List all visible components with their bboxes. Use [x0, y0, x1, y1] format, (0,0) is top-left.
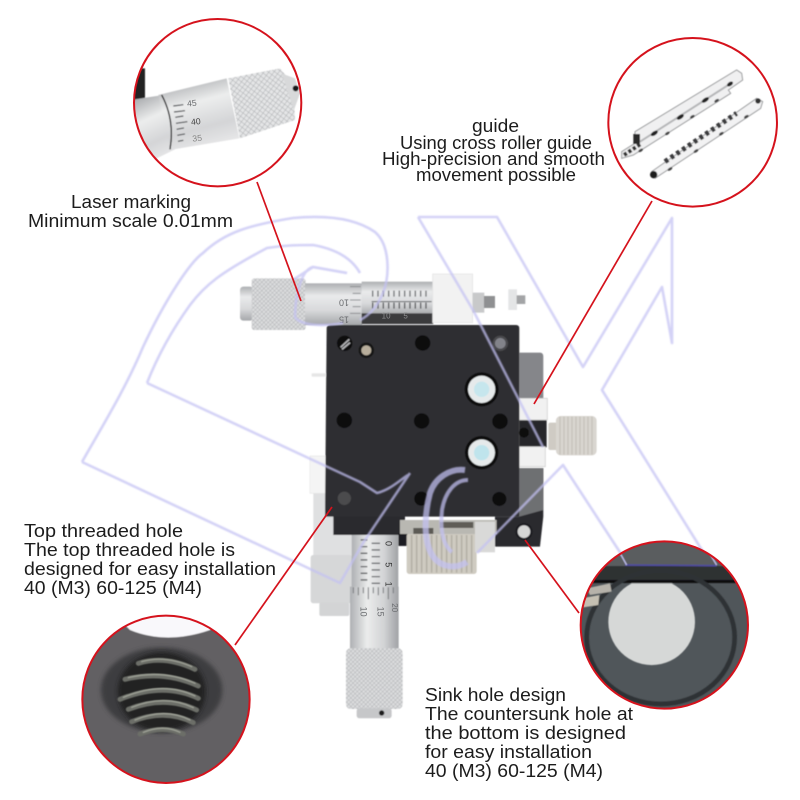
- micrometer scale numbers: 1: [383, 582, 393, 587]
- text: guide: guide: [472, 116, 519, 136]
- text: sink hole design: the bottom is designed: [425, 723, 626, 743]
- text: sink hole design: 40 (M3) 60-125 (M4): [425, 761, 603, 781]
- micrometer scale numbers: 15: [339, 315, 349, 325]
- micrometer scale numbers: 10: [339, 297, 349, 307]
- top micrometer: [240, 274, 525, 330]
- inset circle: micrometer laser marking: 45: [186, 98, 197, 109]
- main product: XY translation stage: [240, 274, 597, 718]
- text: sink hole design: The countersunk hole at: [425, 704, 633, 724]
- text: laser marking: Minimum scale 0.01mm: [28, 211, 233, 231]
- text: laser marking: [28, 192, 233, 231]
- text: top threaded hole: designed for easy installation: [24, 559, 276, 579]
- micrometer scale numbers: 10: [382, 311, 391, 320]
- leader line: sink hole: [525, 540, 579, 613]
- inset circle: micrometer laser marking: 35: [192, 133, 203, 144]
- text: top threaded hole: The top threaded hole is: [24, 540, 235, 560]
- watermark outline: [82, 217, 710, 583]
- text: sink hole design: Sink hole design: [425, 685, 566, 705]
- micrometer scale numbers: [339, 297, 408, 617]
- text: top threaded hole: Top threaded hole: [24, 521, 183, 541]
- text: top threaded hole: [24, 521, 276, 598]
- micrometer scale numbers: 5: [383, 562, 393, 567]
- micrometer scale numbers: 5: [403, 311, 408, 320]
- inset circle: countersunk sink hole: [580, 540, 750, 709]
- text: guide: Using cross roller guide: [400, 133, 592, 153]
- text: guide: [382, 116, 605, 185]
- inset circle: micrometer laser marking: [130, 19, 301, 186]
- micrometer scale numbers: 10: [359, 607, 369, 617]
- left rear micrometer: [310, 373, 352, 616]
- micrometer scale numbers: 20: [390, 603, 399, 613]
- right side bracket and knob: [495, 353, 597, 547]
- text: top threaded hole: 40 (M3) 60-125 (M4): [24, 578, 202, 598]
- leader line: guide: [534, 201, 652, 404]
- black top plate: [325, 325, 519, 517]
- micrometer scale numbers: 15: [375, 607, 385, 617]
- bottom knob and base: [333, 515, 533, 574]
- text: guide: High-precision and smooth: [382, 149, 605, 169]
- text: guide: movement possible: [416, 165, 576, 185]
- text: sink hole design: [425, 685, 633, 781]
- inset circle: cross roller guide rails: [608, 38, 777, 207]
- bottom micrometer: [346, 535, 403, 718]
- inset circle: micrometer laser marking: 40: [190, 116, 201, 127]
- leader line: threaded hole: [235, 507, 332, 645]
- micrometer scale numbers: 0: [383, 541, 393, 546]
- leader line: micrometer: [257, 182, 301, 301]
- text: laser marking: Laser marking: [71, 192, 191, 212]
- inset circle: top threaded hole: [80, 610, 253, 787]
- text: sink hole design: for easy installation: [425, 742, 592, 762]
